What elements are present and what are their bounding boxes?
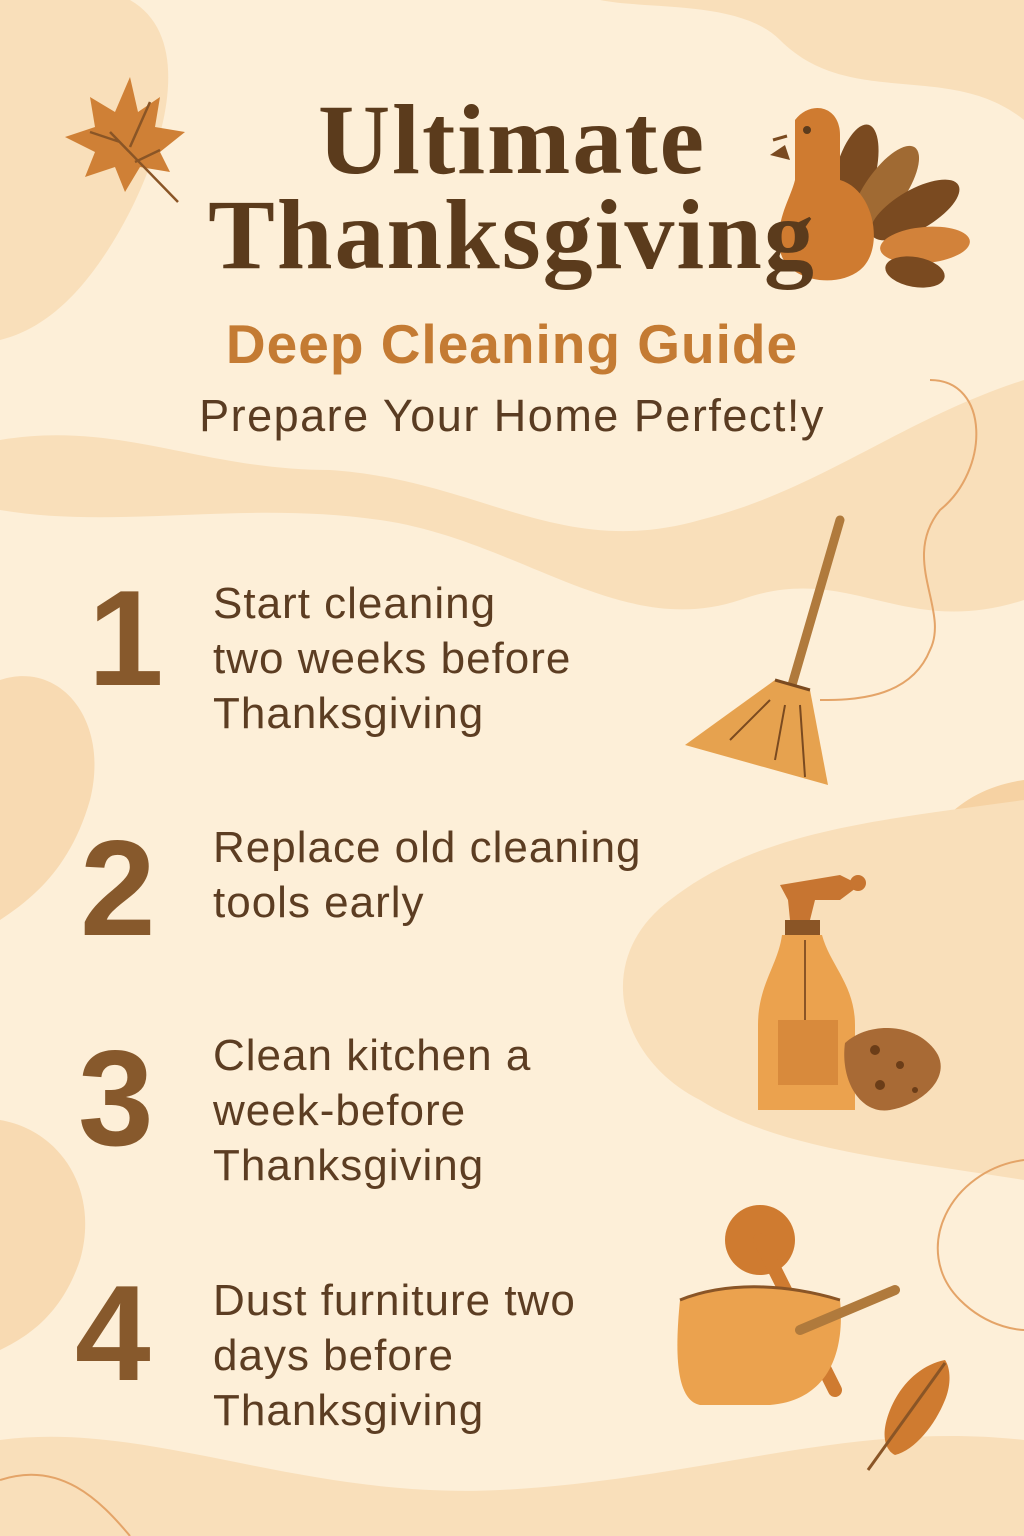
title	[208, 84, 816, 290]
step 4: days before	[213, 1331, 454, 1380]
step 3	[78, 1022, 531, 1190]
step 2: tools early	[213, 878, 425, 927]
step 4: 4	[75, 1257, 151, 1409]
step 4: Thanksgiving	[213, 1386, 484, 1435]
step 3: 3	[78, 1022, 154, 1174]
step 2: Replace old cleaning	[213, 823, 642, 872]
subtitle: Deep Cleaning Guide	[226, 313, 798, 375]
step 3: Clean kitchen a	[213, 1031, 531, 1080]
title: Ultimate	[318, 84, 706, 195]
step 2: 2	[80, 812, 156, 964]
tagline: Prepare Your Home Perfect!y	[199, 390, 825, 441]
icon: turkey	[770, 108, 970, 288]
icon: broom	[685, 516, 844, 785]
icon: spray bottle and sponge	[758, 875, 941, 1110]
icon: maple leaf	[65, 77, 185, 203]
step 1	[88, 562, 571, 738]
step 1: two weeks before	[213, 634, 571, 683]
icon: oak leaf	[866, 1360, 950, 1471]
title: Thanksgiving	[208, 179, 816, 290]
step 1: Start cleaning	[213, 579, 496, 628]
step 3: Thanksgiving	[213, 1141, 484, 1190]
step 3: week-before	[213, 1086, 466, 1135]
step 4: Dust furniture two	[213, 1276, 576, 1325]
step 2	[80, 812, 642, 964]
step 4	[75, 1257, 576, 1435]
step 1: Thanksgiving	[213, 689, 484, 738]
step 1: 1	[88, 562, 164, 714]
icon: dustpan and brush	[677, 1205, 900, 1405]
